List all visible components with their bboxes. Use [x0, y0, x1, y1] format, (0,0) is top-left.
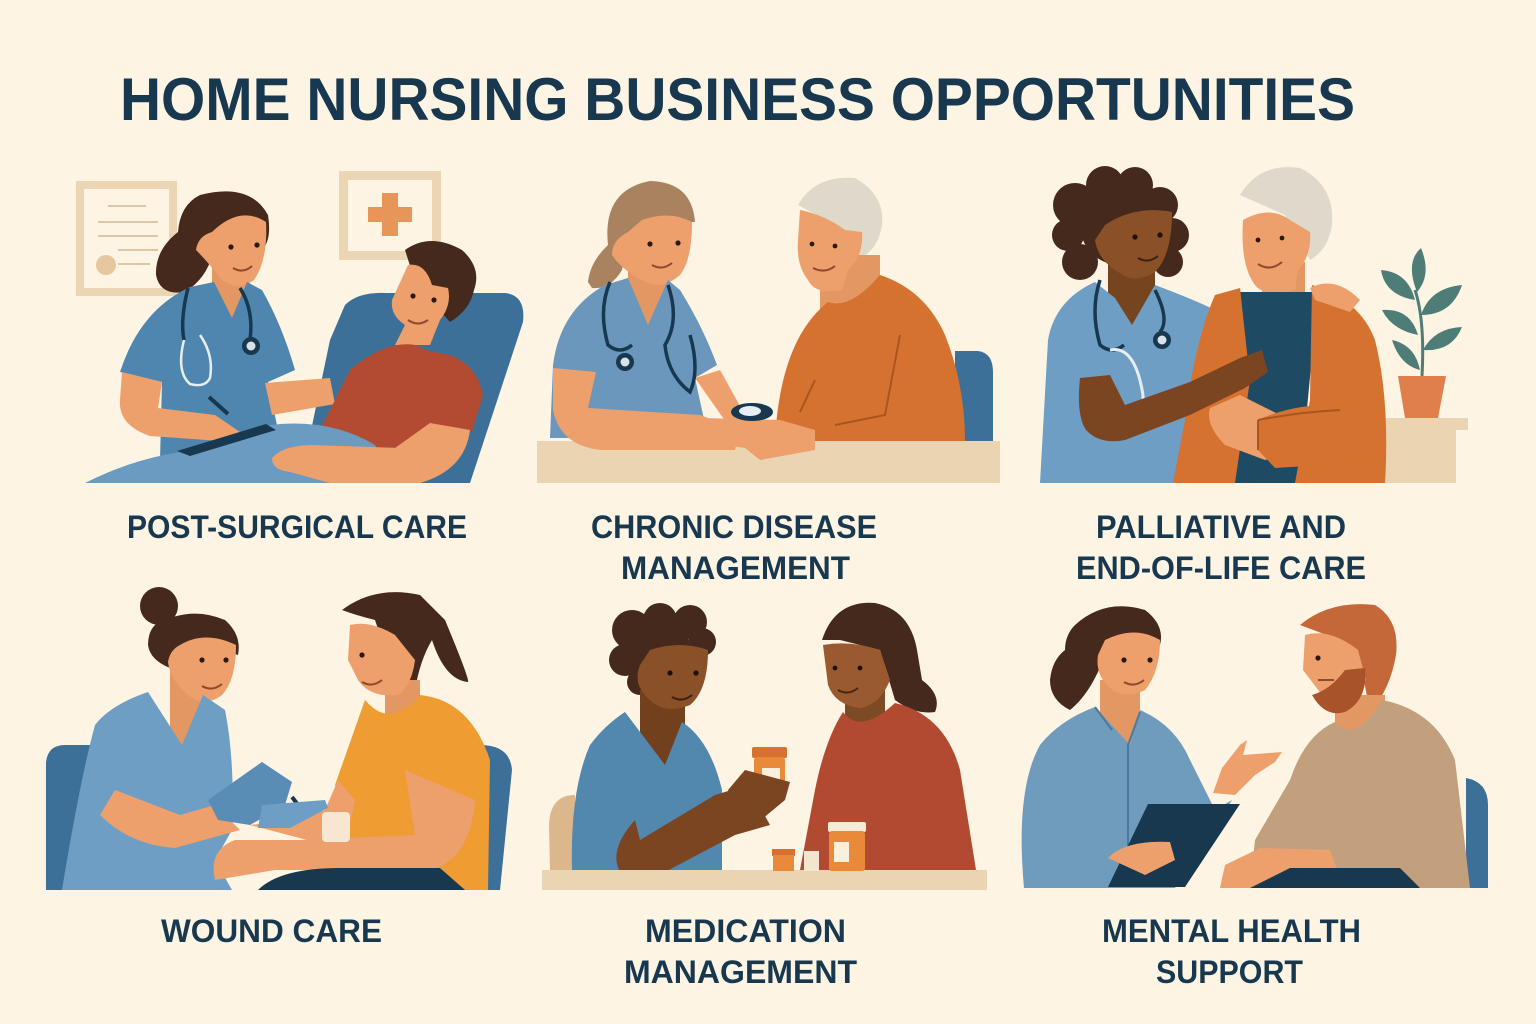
- icon: framed certificate: [76, 181, 177, 296]
- clipboard: [177, 424, 276, 456]
- patient chair: [1466, 778, 1488, 888]
- nurse: [120, 191, 335, 460]
- older patient: [775, 178, 965, 441]
- label: medication management: [624, 913, 857, 990]
- panel: post-surgical care: [76, 171, 523, 483]
- label: mental health support: SUPPORT: [1156, 954, 1303, 990]
- patient chair: [300, 293, 523, 483]
- label: palliative and end-of-life care: PALLIATIVE AND: [1096, 509, 1346, 545]
- icon: framed medical cross: [339, 171, 441, 260]
- label: chronic disease management: CHRONIC DISEASE: [591, 509, 877, 545]
- icon: pill bottle in hand: [728, 747, 790, 825]
- patient: [214, 592, 490, 890]
- patient chair: [955, 351, 993, 441]
- table: [542, 870, 987, 890]
- clipboard: [1108, 804, 1240, 887]
- label: medication management: MEDICATION: [645, 913, 846, 949]
- icon: potted plant: [1381, 248, 1462, 418]
- label: mental health support: [1102, 913, 1361, 990]
- nurse: [572, 603, 770, 872]
- patient: [1220, 604, 1470, 888]
- icon: medicine bottles: [772, 822, 866, 871]
- nurse comforting arm: [1079, 350, 1268, 441]
- label: palliative and end-of-life care: [1076, 509, 1366, 586]
- blue drape and bandage: [258, 800, 350, 842]
- label: mental health support: MENTAL HEALTH: [1102, 913, 1361, 949]
- panel: medication management: [542, 603, 987, 890]
- older patient: [1173, 167, 1386, 483]
- patient chair: [478, 745, 512, 890]
- patient: [800, 603, 976, 870]
- label: medication management: MANAGEMENT: [624, 954, 857, 990]
- side table: [1383, 418, 1468, 483]
- label: post-surgical care: POST-SURGICAL CARE: [127, 509, 467, 545]
- hands: [700, 418, 815, 460]
- panel: chronic disease management: [537, 178, 1000, 483]
- blanket: [85, 424, 395, 483]
- nurse: [62, 587, 292, 890]
- panel: mental health support: [1022, 604, 1488, 888]
- label: chronic disease management: MANAGEMENT: [621, 550, 850, 586]
- nurse chair: [46, 745, 90, 890]
- label: wound care: WOUND CARE: [161, 913, 382, 949]
- table: [537, 441, 1000, 483]
- nurse: [550, 181, 745, 450]
- nurse chair: [549, 795, 575, 870]
- patient: [274, 241, 483, 483]
- label: palliative and end-of-life care: END-OF-LIFE CARE: [1076, 550, 1366, 586]
- nurse: [1040, 166, 1215, 483]
- label: chronic disease management: [591, 509, 877, 586]
- patient hand: [272, 445, 420, 483]
- icon: glucose meter: [731, 403, 773, 421]
- panel: wound care: [46, 587, 512, 890]
- icon: medical tool: [292, 797, 312, 823]
- counsellor hand: [1108, 842, 1175, 875]
- counsellor: [1022, 606, 1282, 888]
- title: HOME NURSING BUSINESS OPPORTUNITIES: [120, 66, 1355, 133]
- panel: palliative and end-of-life care: [1040, 166, 1468, 483]
